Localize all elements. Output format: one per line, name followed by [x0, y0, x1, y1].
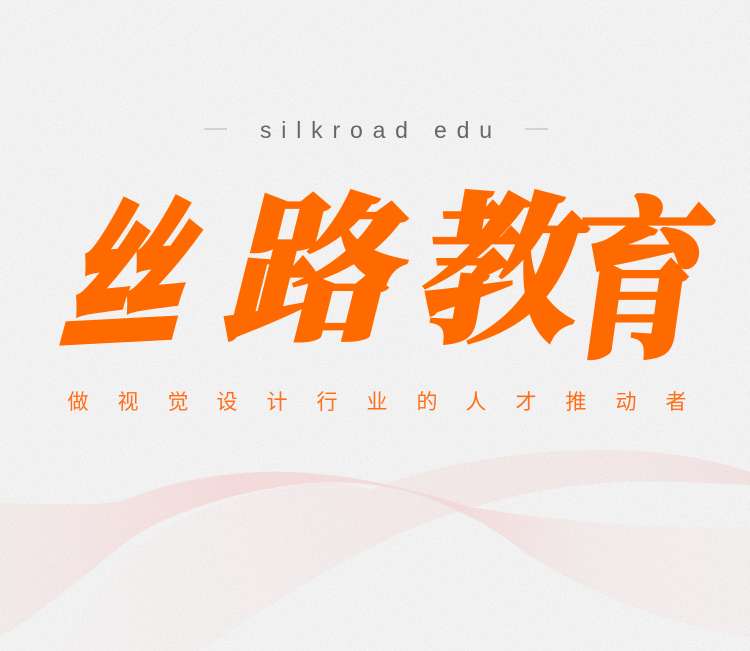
title: brush calligraphy characters: [46, 144, 730, 392]
title: brush calligraphy characters: 路: [211, 144, 438, 371]
Chinese slogan line: 觉: [168, 391, 188, 414]
Chinese slogan line: 做: [68, 391, 88, 414]
title: brush calligraphy characters: 教: [407, 144, 605, 375]
Chinese slogan line: 者: [666, 391, 686, 414]
Chinese slogan line: 才: [516, 391, 536, 414]
Chinese slogan line: 推: [566, 391, 586, 414]
pink wave ribbons: [0, 450, 750, 651]
Chinese slogan line: 设: [216, 391, 238, 414]
Chinese slogan line: 动: [616, 391, 636, 414]
Chinese slogan line: [68, 391, 686, 414]
title: brush calligraphy characters: 丝: [46, 147, 227, 382]
Chinese slogan line: 视: [118, 391, 138, 414]
Chinese slogan line: 人: [466, 391, 486, 414]
Chinese slogan line: 计: [266, 391, 288, 414]
title: brush calligraphy characters: 育: [553, 146, 730, 392]
Chinese slogan line: 业: [366, 391, 388, 414]
Chinese slogan line: 的: [416, 391, 438, 414]
Chinese slogan line: 行: [316, 391, 338, 414]
English tagline: silkroad edu: silkroad edu: [260, 117, 492, 143]
